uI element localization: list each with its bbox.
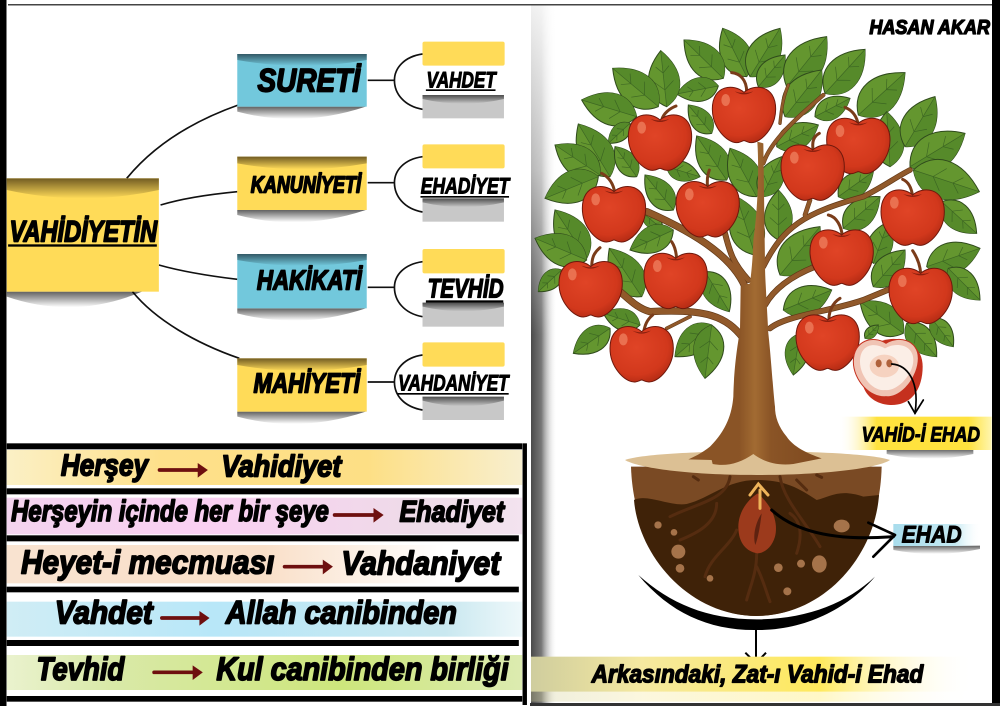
row 3 text: Heyet-i mecmuası [21,545,274,581]
apples [559,73,952,382]
row 4 text: Allah canibinden [225,595,457,630]
box: SURETİ [237,54,367,119]
row 1 text: Herşey [61,448,150,483]
crescent bracket [638,575,875,630]
note: VAHDANİYET: VAHDANİYET [398,371,511,396]
box: HAKİKATİ: HAKİKATİ [257,264,363,295]
soil stones [654,520,850,595]
row 1 text [61,448,343,484]
roots [670,475,822,602]
row 1 band [7,450,522,485]
label: VAHİD-İ EHAD [838,417,992,459]
note: VAHDANİYET [397,342,511,420]
soil bowl [631,467,882,616]
arrow: apple to VAHİD-İ EHAD [892,364,923,413]
row 2 band [7,498,522,534]
row 4 band [7,602,522,637]
note: TEVHİD: TEVHİD [428,274,504,304]
box: MAHİYETİ [237,358,367,424]
leaves [529,20,989,380]
arrow: bracket to caption [745,630,766,663]
note: VAHDET [422,42,505,118]
row 4 text: Vahdet [55,595,154,630]
connector lines [127,54,422,410]
row 4 text [55,595,457,630]
row 1 text: Vahidiyet [221,449,343,484]
box: VAHIDIYETIN [7,178,159,307]
note: EHADİYET: EHADİYET [421,173,511,198]
branches [620,85,910,338]
row 2 text: Herşeyin içinde her bir şeye [11,495,329,528]
row 5 text: Kul canibinden birliği [216,651,510,687]
panel: apple tree [529,16,990,465]
box: MAHİYETİ: MAHİYETİ [253,367,362,398]
caption band: Arkasındaki, Zat-ı Vahid-i Ehad [591,662,924,689]
row 3 band [7,545,522,583]
box: HAKİKATİ [237,254,367,321]
note: TEVHİD [422,249,505,327]
dark soil layer [634,480,879,616]
arrow: seed to EHAD [772,510,895,557]
panel: mind map [7,42,511,424]
box: KANUNİYETİ: KANUNİYETİ [251,171,362,197]
row 5 band [7,655,522,690]
seed [738,484,776,553]
row 3 text: Vahdaniyet [341,546,502,582]
box: VAHIDIYETIN: VAHİDİYETİN [9,216,158,249]
row 2 text: Ehadiyet [400,496,505,529]
note: EHADİYET [420,144,511,222]
cut apple [853,339,923,405]
panel: page centre shadow [531,5,557,706]
box: KANUNİYETİ [237,157,367,222]
row 3 text [21,545,502,582]
panel: soil cross-section [531,417,992,702]
trunk [688,142,822,465]
note: VAHDET: VAHDET [427,68,498,93]
label: EHAD: EHAD [902,521,962,548]
label: EHAD [893,521,982,554]
row 5 text: Tevhid [37,651,126,687]
row 5 text [37,651,510,687]
table rules [7,443,527,705]
sand surface [625,451,890,475]
panel: definitions table [7,443,527,705]
box: SURETİ: SURETİ [258,63,362,99]
caption band [531,657,975,702]
